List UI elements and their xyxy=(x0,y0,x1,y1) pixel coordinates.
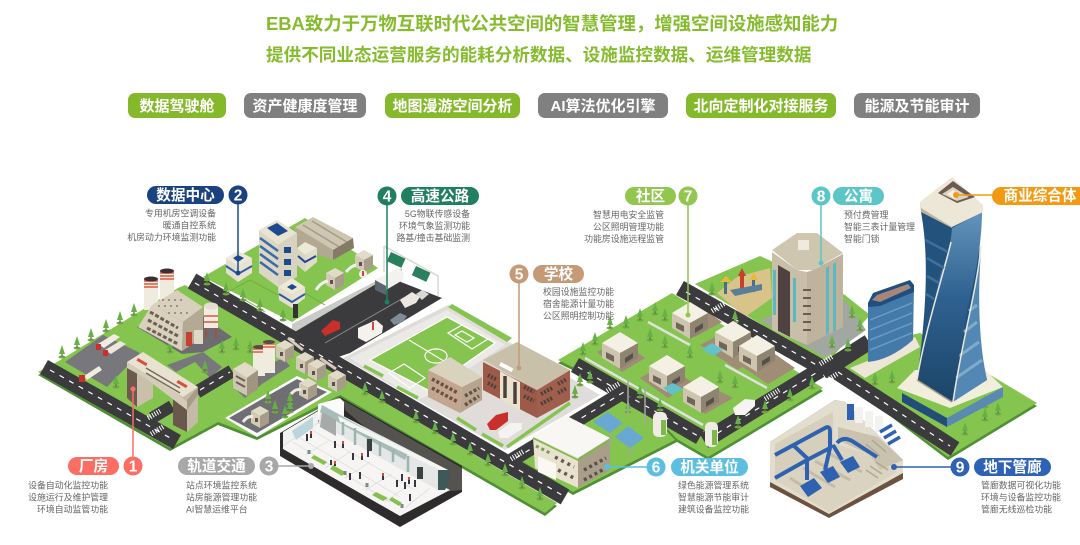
pill: energy audit: 能源及节能审计 xyxy=(864,97,970,115)
label 1: factory: 厂房 xyxy=(79,458,108,475)
community kerbs xyxy=(585,322,767,425)
label 2: data centre: 机房动力环境监测功能 xyxy=(127,232,216,242)
ground: data centre land xyxy=(203,218,402,338)
title: EBA致力于万物互联时代公共空间的智慧管理，增强空间设施感知能力 xyxy=(266,13,838,34)
building: apartment xyxy=(772,233,843,345)
label 6: government: 智慧能源节能审计 xyxy=(678,492,749,502)
label 6: government: 绿色能源管理系统 xyxy=(678,480,749,490)
building: gate factory xyxy=(127,352,198,432)
label 6: government: 建筑设备监控功能 xyxy=(678,504,749,514)
house plots xyxy=(597,340,645,372)
label 5: school: 5 xyxy=(515,266,524,284)
label 5: school: 公区照明控制功能 xyxy=(543,310,614,321)
ground: community land xyxy=(558,293,823,460)
label 2: data centre: 暖通自控系统 xyxy=(163,220,216,230)
label 7: community xyxy=(584,186,698,318)
title: 提供不同业态运营服务的能耗分析数据、设施监控数据、运维管理数据 xyxy=(266,45,811,65)
pill: map roaming: 地图漫游空间分析 xyxy=(392,97,513,115)
label 9: utility tunnel: 环境与设备监控功能 xyxy=(981,492,1061,502)
label 8: apartment: 智能门锁 xyxy=(844,233,880,244)
label 5: school xyxy=(510,264,614,370)
label 9: utility tunnel: 地下管廊 xyxy=(983,458,1042,476)
label 2: data centre xyxy=(127,186,248,276)
pill: asset health xyxy=(244,93,366,118)
pill: northbound services xyxy=(686,93,836,118)
title xyxy=(266,13,838,65)
pill: cockpit: 数据驾驶舱 xyxy=(139,97,215,115)
building: twisted skyscraper xyxy=(897,177,1003,427)
label 7: community: 社区 xyxy=(636,187,665,205)
playground xyxy=(720,268,762,296)
label 4: highway: 高速公路 xyxy=(411,187,470,205)
label 8: apartment: 智能三表计量管理 xyxy=(844,221,915,232)
label 5: school: 宿舍能源计量功能 xyxy=(543,298,614,309)
label 8: apartment: 8 xyxy=(817,188,826,206)
label: commercial complex: 商业综合体 xyxy=(1004,186,1077,204)
building: oval office tower xyxy=(850,280,920,378)
pill: cockpit xyxy=(128,93,226,118)
label 4: highway: 4 xyxy=(383,188,392,206)
roads xyxy=(44,277,955,497)
label 3: rail transit: 站房能源管理功能 xyxy=(186,492,257,502)
pill: AI engine xyxy=(538,93,668,118)
label 3: rail transit: AI智慧运维平台 xyxy=(186,504,248,514)
trees xyxy=(58,272,1002,500)
pill: AI engine: AI算法优化引擎 xyxy=(550,97,656,115)
label 6: government: 6 xyxy=(652,460,661,476)
building: factory xyxy=(138,268,218,351)
building: school xyxy=(428,342,570,418)
label 1: factory: 环境自动监管功能 xyxy=(37,504,108,514)
label 1: factory: 设备自动化监控功能 xyxy=(28,480,108,490)
plaza hedges xyxy=(364,366,570,447)
label 4: highway: 路基/撞击基础监测 xyxy=(397,232,470,243)
label 9: utility tunnel: 管廊数据可视化功能 xyxy=(981,480,1061,490)
label 9: utility tunnel: 9 xyxy=(956,460,965,476)
school cars xyxy=(487,412,522,438)
label 3: rail transit: 站点环境监控系统 xyxy=(186,480,257,490)
crosswalks xyxy=(148,303,837,459)
label 3: rail transit xyxy=(178,456,314,514)
label 9: utility tunnel: 管廊无线巡检功能 xyxy=(981,504,1052,514)
building: government office xyxy=(533,415,610,488)
label 7: community: 功能房设施远程监管 xyxy=(584,233,664,244)
label 7: community: 7 xyxy=(684,188,692,206)
label 8: apartment: 公寓 xyxy=(844,187,873,205)
label 7: community: 公区照明管理功能 xyxy=(593,221,664,232)
feature pills xyxy=(128,93,980,118)
community houses xyxy=(602,302,775,415)
label 9: utility tunnel xyxy=(891,458,1061,514)
pill: map roaming xyxy=(385,93,520,118)
highway vehicles and signs xyxy=(321,246,438,342)
trucks xyxy=(79,334,126,382)
building: data centre xyxy=(226,217,373,318)
label 6: government xyxy=(604,458,749,514)
factory lot xyxy=(137,300,232,354)
label 3: rail transit: 3 xyxy=(265,458,274,476)
label 6: government: 机关单位 xyxy=(680,458,739,476)
label 2: data centre: 数据中心 xyxy=(156,186,215,204)
ground: apartment and playground land xyxy=(695,256,870,364)
label 4: highway xyxy=(378,186,479,304)
ground: factory and corridor land xyxy=(38,285,557,516)
pill: northbound services: 北向定制化对接服务 xyxy=(693,97,829,115)
metro station xyxy=(280,397,462,527)
label 3: rail transit: 轨道交通 xyxy=(187,457,246,475)
ground: school plaza and field xyxy=(343,304,600,450)
ground: government land xyxy=(520,392,692,495)
underground utility tunnel xyxy=(770,400,903,518)
isometric city illustration xyxy=(38,177,1037,527)
pill: energy audit xyxy=(854,93,980,118)
small factories xyxy=(233,338,346,428)
label: commercial complex xyxy=(953,186,1080,205)
label 1: factory: 设施运行及维护管理 xyxy=(28,492,108,502)
label 5: school: 学校 xyxy=(544,265,573,283)
label 2: data centre: 专用机房空调设备 xyxy=(145,208,216,218)
second factory lot xyxy=(225,376,332,437)
pill: asset health: 资产健康度管理 xyxy=(252,97,358,115)
label 8: apartment xyxy=(812,186,915,266)
label 2: data centre: 2 xyxy=(234,188,242,204)
truck lot xyxy=(65,335,140,387)
label 5: school: 校园设施监控功能 xyxy=(543,286,614,297)
label 7: community: 智慧用电安全监管 xyxy=(593,209,664,220)
solar panels and storage xyxy=(593,378,718,456)
label 1: factory: 1 xyxy=(129,458,138,476)
ground: tower land xyxy=(840,333,1037,460)
label 4: highway: 5G物联传感设备 xyxy=(405,208,470,219)
label 8: apartment: 预付费管理 xyxy=(844,209,888,220)
label 4: highway: 环境气象监测功能 xyxy=(399,220,470,231)
label 1: factory xyxy=(28,386,142,514)
